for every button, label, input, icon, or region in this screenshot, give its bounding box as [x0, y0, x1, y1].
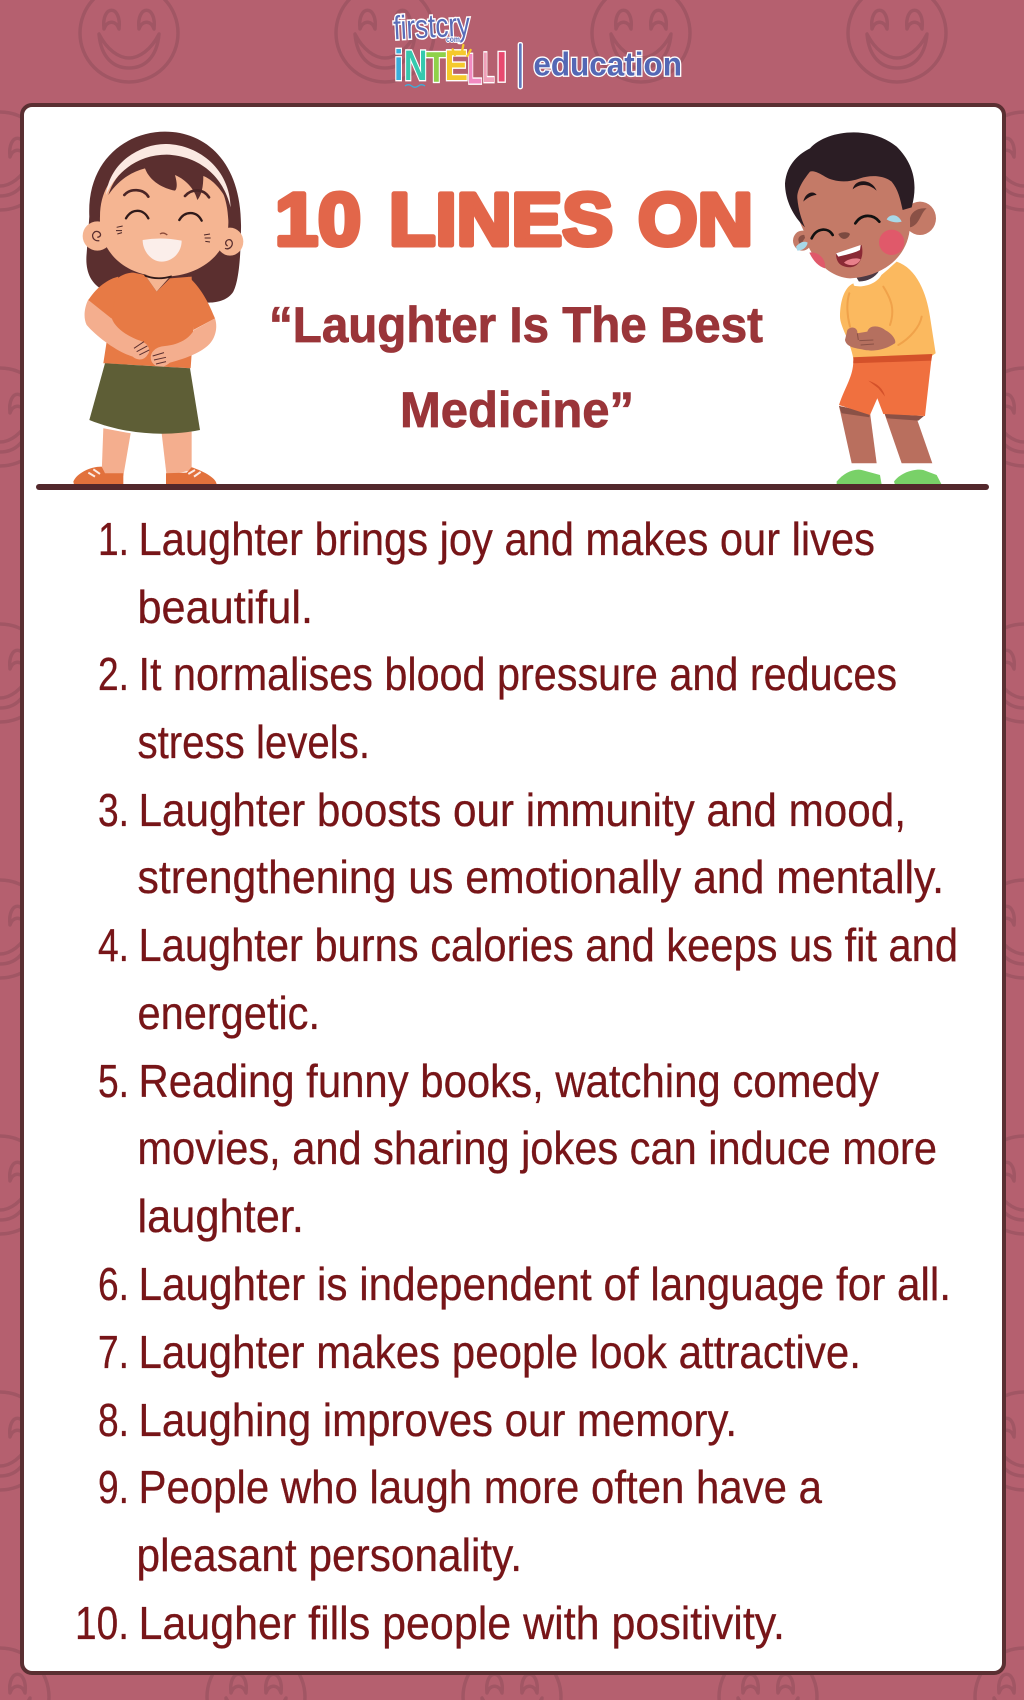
logo wordmark: intelli: L	[467, 45, 482, 93]
line 3: 3.	[98, 784, 129, 836]
line 5	[98, 1055, 937, 1242]
logo wordmark: education: education	[533, 46, 682, 83]
line 1: Laughter brings joy and makes our lives	[138, 513, 875, 565]
line 10: 10.	[75, 1597, 129, 1649]
line 6: Laughter is independent of language for all.	[138, 1258, 951, 1310]
line 3: strengthening us emotionally and mentally.	[138, 851, 944, 903]
line 2: stress levels.	[138, 716, 370, 768]
logo wordmark: firstcry: firstcry	[392, 6, 471, 47]
logo divider	[518, 43, 522, 89]
numbered list of ten lines	[75, 513, 958, 1649]
line 6: 6.	[98, 1258, 129, 1310]
line 10: Laugher fills people with positivity.	[138, 1597, 785, 1649]
line 5: Reading funny books, watching comedy	[138, 1055, 879, 1107]
logo wordmark: intelli: E	[445, 42, 468, 90]
line 7: Laughter makes people look attractive.	[138, 1326, 861, 1378]
illustration: laughing girl	[73, 132, 243, 485]
line 1	[98, 513, 875, 633]
line 2	[98, 648, 897, 768]
subtitle: Laughter Is The Best Medicine: “Laughter Is The Best	[269, 297, 763, 353]
subtitle: Laughter Is The Best Medicine: Medicine”	[400, 382, 634, 438]
line 8: 8.	[98, 1394, 129, 1446]
line 3	[98, 784, 944, 903]
line 8: Laughing improves our memory.	[138, 1394, 737, 1446]
logo wordmark: intelli: N	[404, 42, 427, 90]
line 9: People who laugh more often have a	[138, 1461, 822, 1513]
logo wordmark: intelli: i	[394, 42, 403, 90]
title: 10 LINES ON: LINES	[389, 178, 613, 261]
illustration: laughing boy	[785, 132, 942, 485]
title: 10 LINES ON: 10	[275, 178, 361, 261]
line 2: 2.	[98, 648, 129, 700]
line 5: movies, and sharing jokes can induce more	[138, 1122, 937, 1174]
line 4	[98, 919, 958, 1039]
logo wordmark: firstcry: com	[446, 35, 460, 44]
title: 10 LINES ON	[275, 178, 753, 261]
logo wordmark: intelli: I	[496, 43, 507, 91]
line 4: energetic.	[138, 987, 320, 1039]
line 9	[98, 1461, 822, 1581]
logo: firstcry intelli education	[392, 6, 682, 93]
line 2: It normalises blood pressure and reduces	[138, 648, 897, 700]
line 9: pleasant personality.	[136, 1529, 522, 1581]
logo wordmark: intelli	[394, 42, 507, 93]
line 5: 5.	[98, 1055, 129, 1107]
line 5: laughter.	[138, 1190, 304, 1242]
logo wordmark: intelli: L	[483, 44, 495, 92]
subtitle: Laughter Is The Best Medicine	[269, 297, 763, 438]
title: 10 LINES ON: ON	[638, 178, 753, 261]
line 3: Laughter boosts our immunity and mood,	[138, 784, 906, 836]
divider under header	[36, 484, 989, 490]
line 1: 1.	[98, 513, 129, 565]
line 1: beautiful.	[138, 581, 313, 633]
line 4: 4.	[98, 919, 129, 971]
line 7: 7.	[98, 1326, 129, 1378]
logo wordmark: intelli: T	[426, 44, 447, 92]
line 4: Laughter burns calories and keeps us fit and	[138, 919, 958, 971]
line 9: 9.	[98, 1461, 129, 1513]
